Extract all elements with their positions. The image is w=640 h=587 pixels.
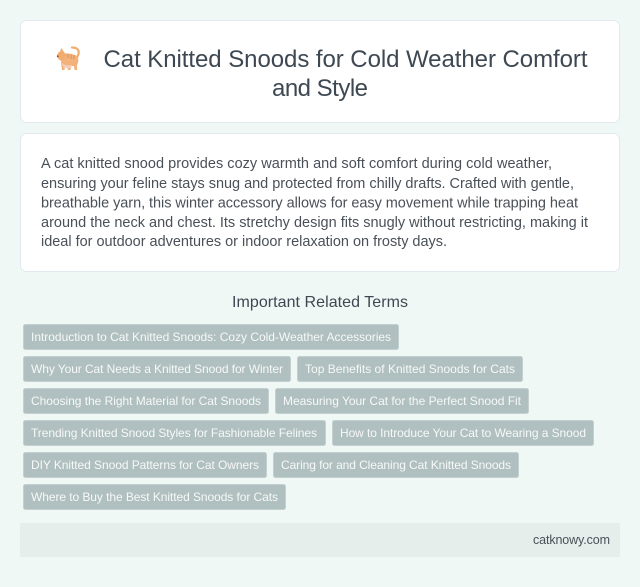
title text [104, 46, 588, 102]
tag [24, 356, 290, 382]
description text: breathable yarn, this winter accessory allows for easy movement while trapping heat [41, 196, 578, 212]
panel: description [20, 134, 620, 272]
tag: DIY Knitted Snood Patterns for Cat Owners [31, 458, 259, 472]
tag: Where to Buy the Best Knitted Snoods for Cats [31, 490, 278, 504]
tag [24, 388, 268, 414]
tag: Introduction to Cat Knitted Snoods: Cozy Cold-Weather Accessories [31, 330, 391, 344]
tag: Trending Knitted Snood Styles for Fashionable Felines [31, 426, 317, 440]
tag [274, 452, 518, 478]
tag [332, 420, 594, 446]
tag: Why Your Cat Needs a Knitted Snood for Winter [31, 362, 283, 376]
footer [20, 523, 620, 557]
panel: title [20, 20, 620, 122]
title text: and Style [272, 75, 368, 102]
description text: ideal for outdoor adventures or indoor relaxation on frosty days. [41, 234, 447, 250]
footer: catknowy.com [533, 533, 610, 547]
tag: Choosing the Right Material for Cat Snoods [31, 394, 261, 408]
tag: Top Benefits of Knitted Snoods for Cats [305, 362, 515, 376]
icon: cat [57, 48, 79, 70]
description text: A cat knitted snood provides cozy warmth and soft comfort during cold weather, [41, 156, 552, 172]
description text: around the neck and chest. Its stretchy design fits snugly without restricting, making it [41, 215, 588, 231]
heading: important related terms: Important Related Terms [232, 294, 408, 311]
tag [24, 484, 286, 510]
tag list [24, 324, 594, 510]
tag: How to Introduce Your Cat to Wearing a Snood [340, 426, 586, 440]
title text: Cat Knitted Snoods for Cold Weather Comfort [104, 46, 588, 73]
tag [24, 420, 326, 446]
tag: Caring for and Cleaning Cat Knitted Snoods [281, 458, 511, 472]
tag: Measuring Your Cat for the Perfect Snood Fit [283, 394, 522, 408]
description text: ensuring your feline stays snug and protected from chilly drafts. Crafted with gentle, [41, 176, 574, 192]
description text [41, 156, 588, 250]
tag [24, 324, 398, 350]
tag [24, 452, 266, 478]
tag [276, 388, 528, 414]
tag [298, 356, 522, 382]
